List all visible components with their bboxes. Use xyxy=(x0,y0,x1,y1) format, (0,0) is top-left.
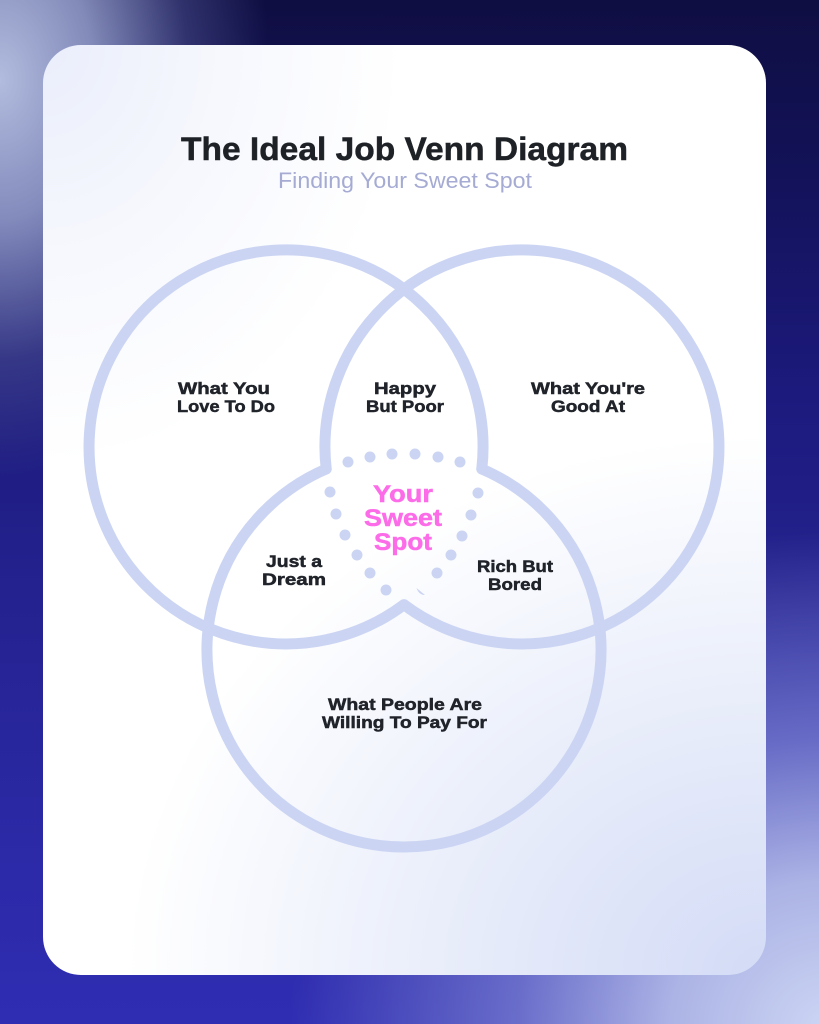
circle: what you're good at xyxy=(325,250,719,644)
label: what people are willing to pay for: What People Are xyxy=(328,695,482,714)
circle: what people are willing to pay for xyxy=(207,469,601,847)
label: just a dream: Dream xyxy=(262,570,326,589)
subtitle: Finding Your Sweet Spot xyxy=(278,168,532,193)
label: rich but bored: Bored xyxy=(488,575,542,594)
label: rich but bored xyxy=(477,557,553,594)
label: your sweet spot: Spot xyxy=(374,529,432,556)
circle: what you love to do xyxy=(89,250,483,644)
label: happy but poor: But Poor xyxy=(366,397,444,416)
label: what you love to do: Love To Do xyxy=(177,397,275,416)
title: The Ideal Job Venn Diagram xyxy=(181,131,628,167)
label: what you love to do xyxy=(177,379,275,416)
label: just a dream: Just a xyxy=(266,552,323,571)
label: your sweet spot: Your xyxy=(373,481,433,508)
label: what you love to do: What You xyxy=(178,379,270,398)
label: what you're good at: What You're xyxy=(531,379,645,398)
dotted sweet spot outline xyxy=(324,448,484,596)
label: your sweet spot xyxy=(364,481,442,556)
label: what people are willing to pay for xyxy=(322,695,487,732)
label: just a dream xyxy=(262,552,326,589)
label: rich but bored: Rich But xyxy=(477,557,553,576)
label: what you're good at xyxy=(531,379,645,416)
label: what people are willing to pay for: Willing To Pay For xyxy=(322,713,487,732)
label: your sweet spot: Sweet xyxy=(364,505,442,532)
label: what you're good at: Good At xyxy=(551,397,625,416)
venn diagram circles xyxy=(89,250,719,847)
label: happy but poor xyxy=(366,379,444,416)
label: happy but poor: Happy xyxy=(374,379,437,398)
